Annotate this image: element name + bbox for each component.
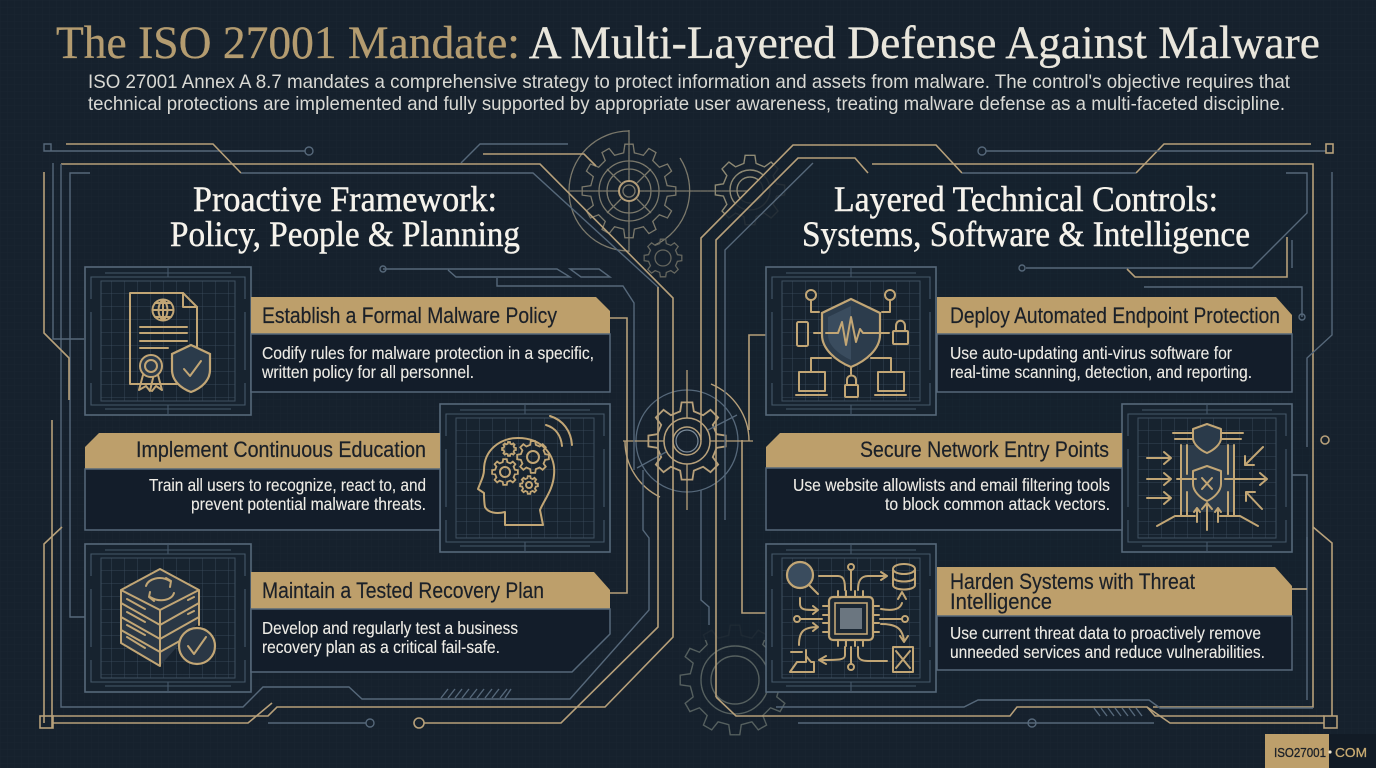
heading: layered technical controls: Layered Technical Controls: xyxy=(834,179,1218,219)
card description: real-time scanning, detection, and reporting. xyxy=(950,362,1252,382)
heading: proactive framework: Policy, People & Planning xyxy=(170,214,520,254)
card description: written policy for all personnel. xyxy=(261,362,474,382)
card description: Codify rules for malware protection in a specific, xyxy=(262,343,594,363)
card title text: Deploy Automated Endpoint Protection xyxy=(950,303,1280,328)
card title bar xyxy=(937,297,1292,334)
gear: central hub xyxy=(623,370,753,510)
card title text: Secure Network Entry Points xyxy=(860,437,1109,462)
panel: proactive framework xyxy=(85,179,610,692)
card description: to block common attack vectors. xyxy=(885,494,1110,514)
card title text: Harden Systems with Threat xyxy=(950,569,1195,594)
card: continuous education xyxy=(85,404,610,552)
watermark: ISO27001 xyxy=(1274,745,1326,760)
card description: Develop and regularly test a business xyxy=(262,618,518,638)
circuit lines: left panel xyxy=(40,144,673,728)
icon: shield with devices xyxy=(796,290,908,397)
card title text: Implement Continuous Education xyxy=(136,437,426,462)
card title bar xyxy=(251,572,610,609)
card description: Use website allowlists and email filtering tools xyxy=(793,475,1110,495)
card description: Train all users to recognize, react to, and xyxy=(149,475,426,495)
subtitle: technical protections are implemented and fully supported by appropriate user awareness, treating malware defense as a multi-faceted discipline. xyxy=(88,93,1285,115)
card description: prevent potential malware threats. xyxy=(191,494,426,514)
title: The ISO 27001 Mandate: A Multi-Layered Defense Against Malware xyxy=(56,17,1320,69)
card description xyxy=(261,343,594,382)
icon: policy document with shield xyxy=(130,293,210,392)
subtitle: ISO 27001 Annex A 8.7 mandates a comprehensive strategy to protect information and assets from malware. The control's objective requires that xyxy=(88,71,1291,93)
card description: recovery plan as a critical fail-safe. xyxy=(262,637,500,657)
card title bar xyxy=(251,297,610,334)
card title bar xyxy=(937,567,1292,616)
card description xyxy=(950,623,1265,662)
card description xyxy=(950,343,1252,382)
heading: proactive framework xyxy=(170,179,520,254)
card description: Use current threat data to proactively remove xyxy=(950,623,1261,643)
card title text: Establish a Formal Malware Policy xyxy=(262,303,557,328)
icon: processor with network xyxy=(787,562,915,672)
card description: unneeded services and reduce vulnerabilities. xyxy=(950,642,1265,662)
card: recovery plan xyxy=(85,544,610,692)
heading: layered technical controls: Systems, Software & Intelligence xyxy=(802,214,1250,254)
outer gears xyxy=(569,130,790,735)
card: network entry points xyxy=(766,404,1292,552)
card: endpoint protection xyxy=(766,267,1292,415)
card title bar xyxy=(85,433,440,469)
icon: head with gears xyxy=(478,416,572,525)
card: threat intelligence xyxy=(766,544,1292,692)
card title bar xyxy=(766,433,1122,468)
card description xyxy=(793,475,1110,514)
watermark xyxy=(1265,734,1376,768)
gear: lower small xyxy=(644,239,682,277)
panel: layered technical controls xyxy=(766,179,1292,692)
gear: bottom xyxy=(680,625,790,735)
card description xyxy=(262,618,518,657)
watermark: COM xyxy=(1335,745,1367,760)
card: malware policy xyxy=(85,267,610,415)
card description xyxy=(149,475,426,514)
panel mask xyxy=(701,145,1313,700)
icon: gateway with arrows xyxy=(1147,424,1267,530)
heading: proactive framework: Proactive Framework: xyxy=(193,179,497,219)
circuit lines: right panel xyxy=(701,144,1337,728)
gear: top center xyxy=(569,130,748,252)
gear: right small xyxy=(715,155,785,225)
card description: Use auto-updating anti-virus software for xyxy=(950,343,1232,363)
card title text: Intelligence xyxy=(950,589,1052,614)
heading: layered technical controls xyxy=(802,179,1250,254)
card title text xyxy=(950,569,1195,614)
subtitle xyxy=(88,71,1291,115)
card title text: Maintain a Tested Recovery Plan xyxy=(262,578,544,603)
icon: server stack with check xyxy=(121,569,215,666)
